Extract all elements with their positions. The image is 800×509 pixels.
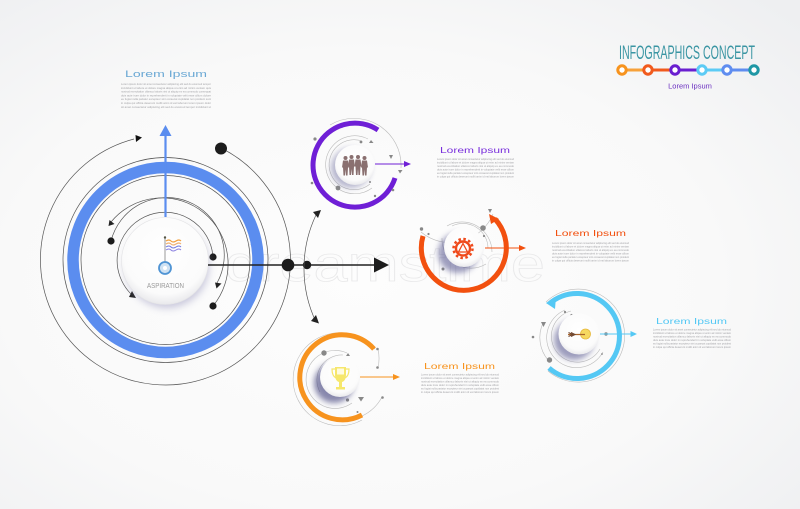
panel: orange trophy — [293, 333, 500, 426]
thin arcs — [293, 333, 382, 426]
thin arcs — [326, 118, 401, 194]
central disc — [122, 218, 209, 308]
small nodes — [321, 348, 384, 413]
title: infographics concept — [618, 43, 758, 90]
thin arcs — [421, 214, 493, 268]
arrow — [375, 161, 411, 167]
body copy: nostrud exercitation ullamco laboris nisi ut aliquip ex ea commodo consequat — [121, 90, 211, 94]
small nodes — [420, 209, 492, 270]
text block — [437, 146, 515, 178]
disc — [438, 227, 484, 273]
text block: Lorem ipsum dolor sit amet consectetur adipiscing elit sed do eiusmod — [653, 328, 731, 332]
text block: in culpa qui officia deserunt mollit anim id est laborum lorem ipsum — [421, 390, 500, 394]
icon: flag on pole — [159, 236, 181, 274]
thick blue ring — [73, 168, 258, 352]
body copy: duis aute irure dolor in reprehenderit in voluptate velit esse cillum dolore — [121, 93, 211, 97]
watermark: dreamstime — [225, 236, 545, 292]
text block: in culpa qui officia deserunt mollit anim id est laborum lorem ipsum — [653, 345, 732, 349]
body copy: eu fugiat nulla pariatur excepteur sint occaecat cupidatat non proident sunt — [121, 97, 211, 101]
inner arcs with dots and arrows — [107, 198, 228, 310]
text block: incididunt ut labore et dolore magna aliqua ut enim ad minim veniam — [653, 331, 732, 335]
connector: black arrow with branch arc — [208, 210, 389, 324]
subtitle: Lorem Ipsum — [668, 82, 712, 90]
text block: in culpa qui officia deserunt mollit anim id est laborum lorem ipsum — [552, 258, 630, 262]
body copy — [121, 82, 212, 109]
text block: incididunt ut labore et dolore magna aliqua ut enim ad minim veniam — [437, 160, 515, 164]
red ring — [421, 219, 506, 290]
panel: red gear — [420, 209, 630, 290]
label: aspiration: ASPIRATION — [147, 281, 184, 290]
orange ring — [300, 335, 374, 420]
text block: aspiration — [121, 69, 212, 109]
text block — [421, 362, 500, 394]
text block: Lorem ipsum dolor sit amet consectetur adipiscing elit sed do eiusmod — [552, 241, 629, 245]
text block: duis aute irure dolor in reprehenderit in voluptate velit esse cillum — [421, 383, 500, 387]
text block: Lorem Ipsum — [440, 146, 510, 155]
arrow — [485, 245, 526, 251]
disc — [331, 145, 375, 188]
icon: dart and target — [568, 329, 590, 339]
text block — [552, 229, 630, 262]
main circle: aspiration — [40, 125, 290, 385]
text block: nostrud exercitation ullamco laboris nisi ut aliquip ex ea commodo — [552, 248, 629, 252]
body copy: incididunt ut labore et dolore magna aliqua ut enim ad minim veniam quis — [121, 86, 212, 90]
text block: Lorem Ipsum — [656, 317, 728, 326]
text block: Lorem Ipsum — [424, 362, 496, 371]
text block: in culpa qui officia deserunt mollit anim id est laborum lorem ipsum — [437, 174, 515, 178]
disc — [314, 357, 360, 403]
outer arc with arrow and dot — [40, 135, 290, 385]
text block: duis aute irure dolor in reprehenderit in voluptate velit esse cillum — [552, 252, 630, 256]
thin arcs — [540, 289, 625, 382]
body copy: in culpa qui officia deserunt mollit anim id est laborum lorem ipsum dolor — [121, 101, 211, 105]
small nodes — [532, 311, 608, 363]
text block: nostrud exercitation ullamco laboris nisi ut aliquip ex ea commodo — [421, 380, 499, 384]
text block — [653, 317, 732, 349]
text block: duis aute irure dolor in reprehenderit in voluptate velit esse cillum — [437, 168, 515, 172]
disc — [554, 314, 600, 360]
up arrow — [160, 125, 172, 217]
text block: nostrud exercitation ullamco laboris nisi ut aliquip ex ea commodo — [653, 334, 731, 338]
timeline of six coloured dots — [618, 66, 758, 74]
cyan ring — [549, 294, 619, 378]
icon: four people — [342, 155, 368, 176]
text block: eu fugiat nulla pariatur excepteur sint occaecat cupidatat non proident — [437, 171, 514, 175]
text block: Lorem Ipsum — [555, 229, 627, 238]
heading: Lorem Ipsum — [125, 69, 207, 80]
icon: trophy — [332, 367, 349, 390]
panel: cyan target — [532, 289, 732, 382]
text block: eu fugiat nulla pariatur excepteur sint occaecat cupidatat non proident — [421, 386, 499, 390]
icon: gear — [454, 239, 472, 258]
text block: Lorem ipsum dolor sit amet consectetur adipiscing elit sed do eiusmod — [421, 372, 499, 376]
body copy: sit amet consectetur adipiscing elit sed do eiusmod tempor incididunt ut — [121, 105, 211, 109]
thin rings — [63, 158, 268, 362]
arrow — [360, 374, 400, 380]
text block: eu fugiat nulla pariatur excepteur sint occaecat cupidatat non proident — [653, 342, 731, 346]
text block: incididunt ut labore et dolore magna aliqua ut enim ad minim veniam — [421, 376, 500, 380]
text block: Lorem ipsum dolor sit amet consectetur adipiscing elit sed do eiusmod — [437, 157, 514, 161]
arrow — [600, 331, 637, 337]
text block: incididunt ut labore et dolore magna aliqua ut enim ad minim veniam — [552, 244, 630, 248]
text block: eu fugiat nulla pariatur excepteur sint occaecat cupidatat non proident — [552, 255, 629, 259]
text block: nostrud exercitation ullamco laboris nisi ut aliquip ex ea commodo — [437, 164, 514, 168]
small nodes — [311, 137, 402, 197]
panel: purple people — [311, 118, 515, 207]
text block: duis aute irure dolor in reprehenderit in voluptate velit esse cillum — [653, 338, 732, 342]
purple ring — [313, 123, 395, 207]
body copy: Lorem ipsum dolor sit amet consectetur adipiscing elit sed do eiusmod tempor — [121, 82, 211, 86]
